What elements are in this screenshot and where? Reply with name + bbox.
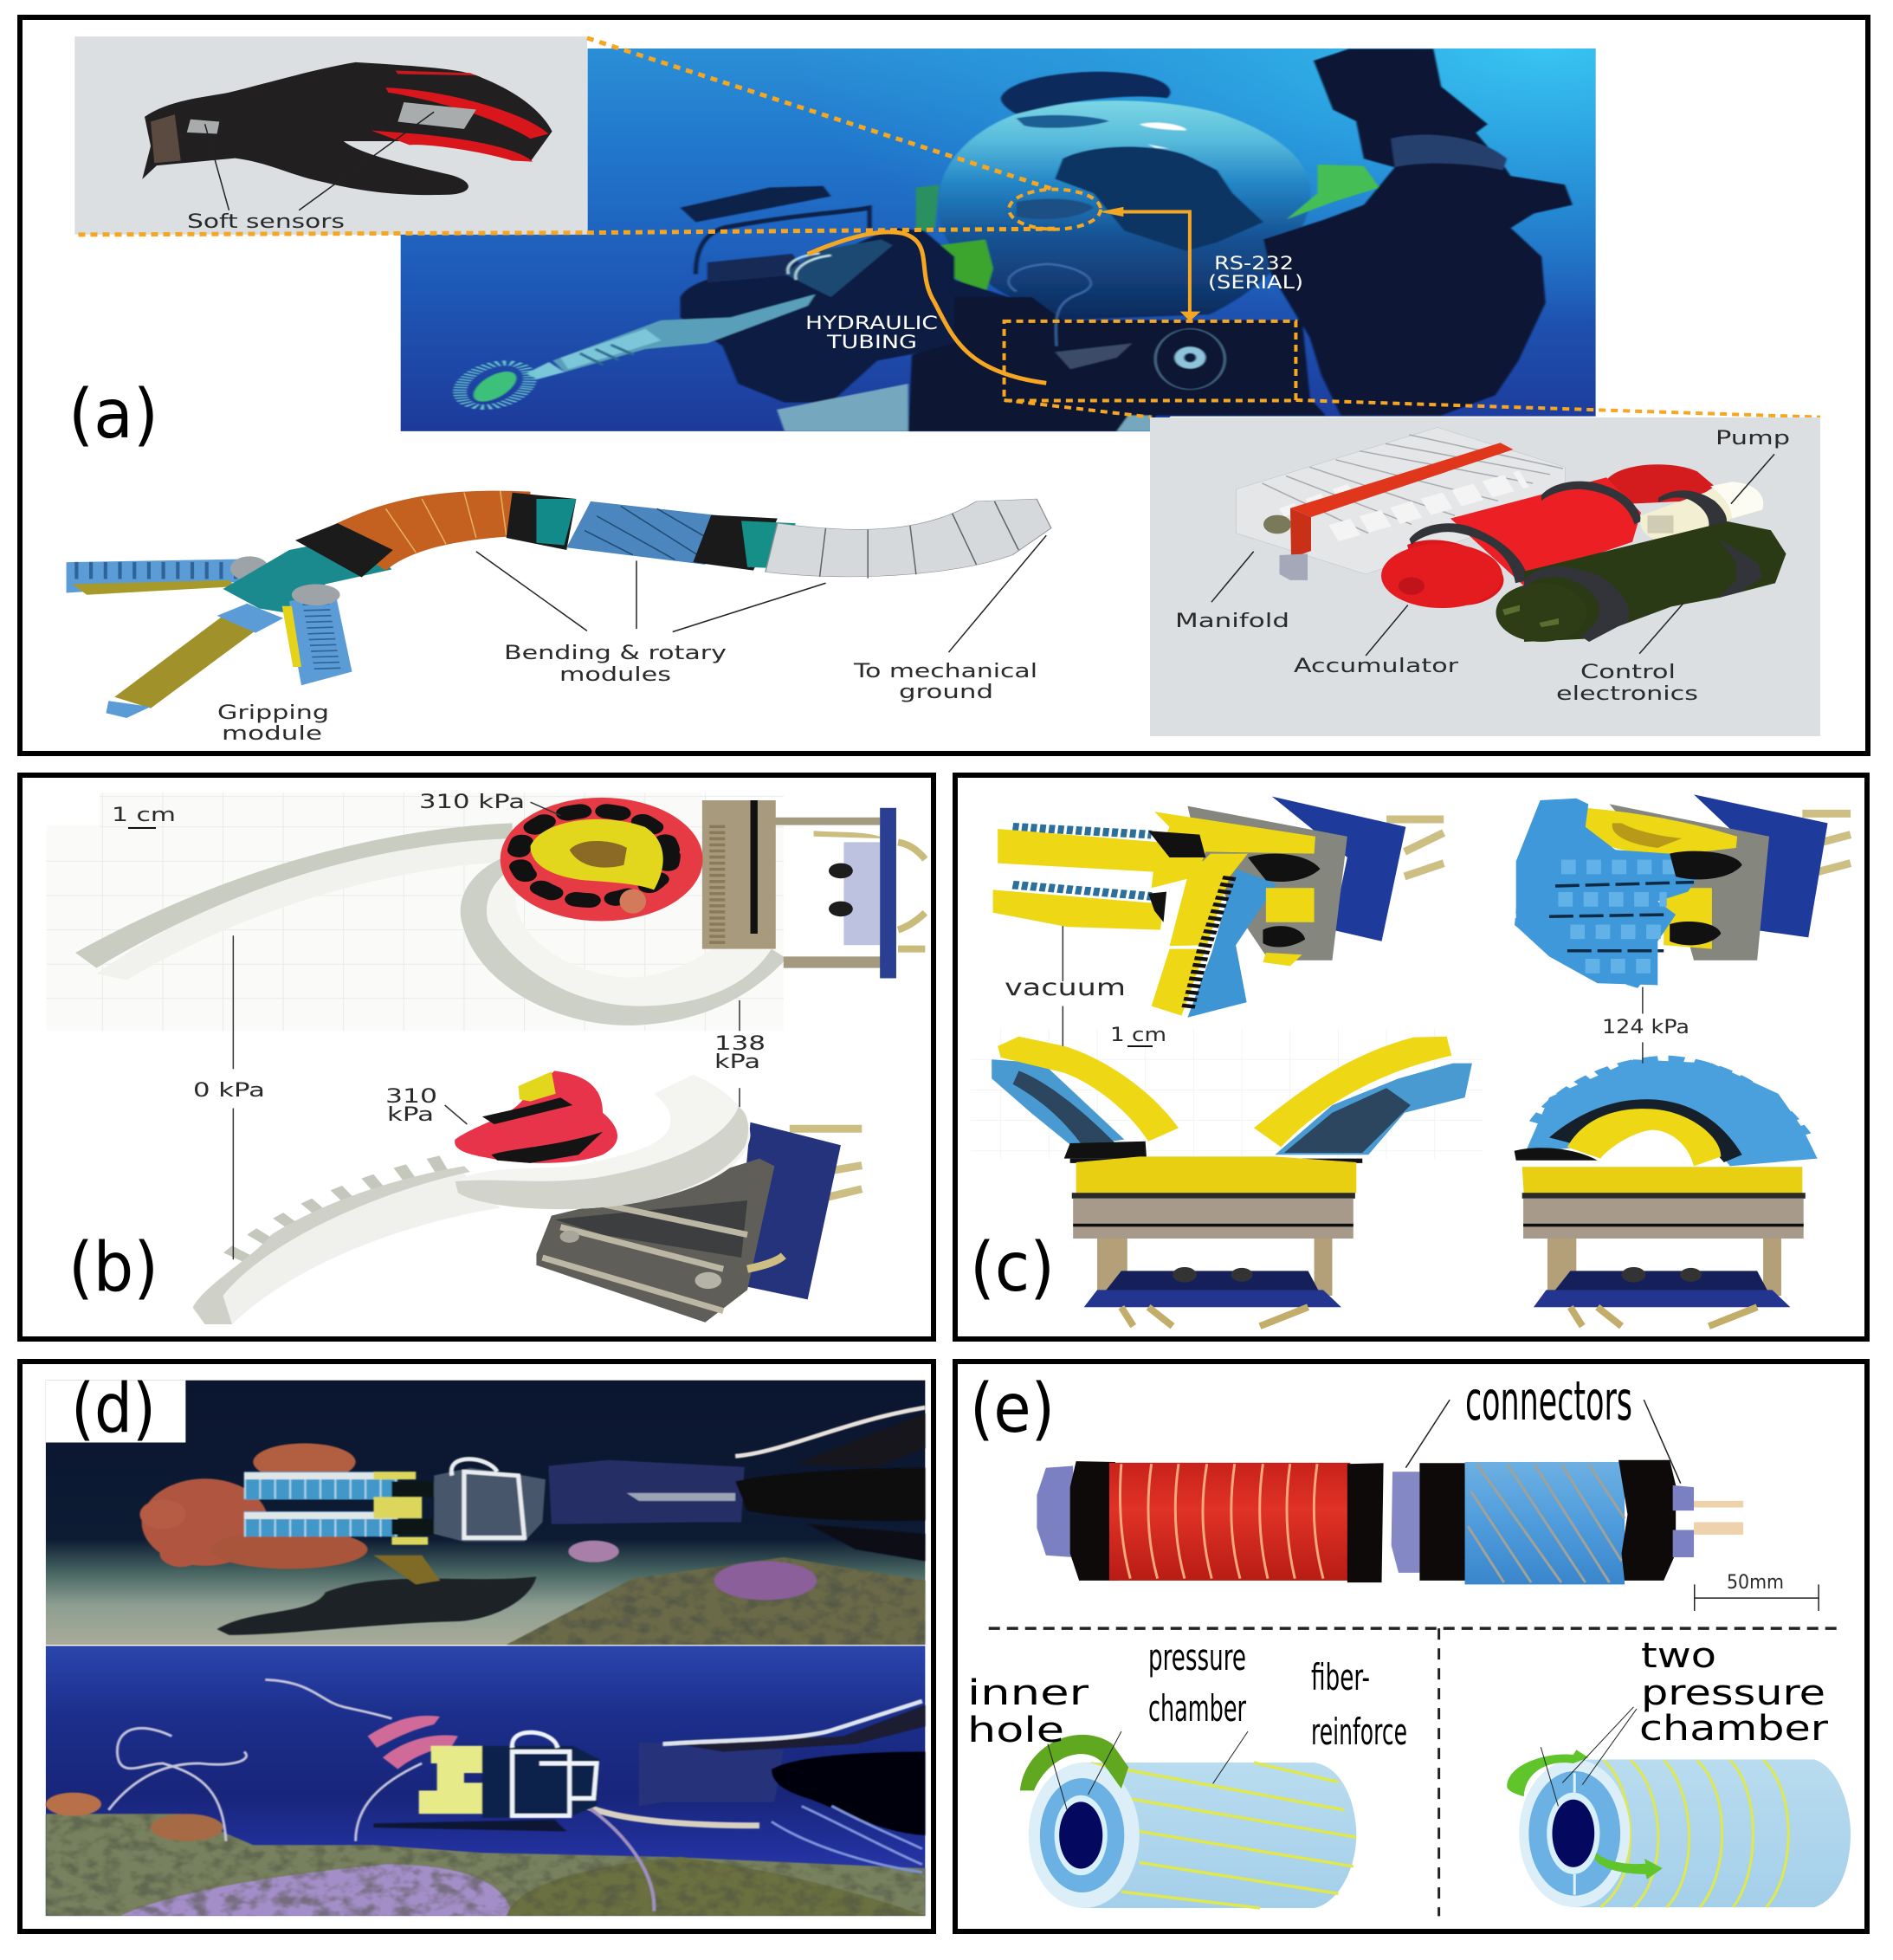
label: inner hole: hole	[967, 1711, 1064, 1750]
label: Bending and rotary modules: Bending & rotary	[504, 643, 727, 664]
panel c: vacuum versus pressure actuation	[955, 775, 1867, 1339]
label: Pump: Pump	[1715, 428, 1790, 450]
panel b border	[20, 775, 934, 1339]
label: RS-232 serial: RS-232	[1214, 253, 1294, 274]
label: Control electronics: electronics	[1556, 683, 1698, 705]
label: hydraulic tubing	[805, 313, 938, 353]
label: connectors: connectors	[1465, 1369, 1632, 1433]
orange callouts: dashed zoom lines, hydraulic tubing and RS-232 arrow	[78, 38, 1820, 417]
electronics housing	[1524, 521, 1786, 642]
white label backing	[46, 1381, 185, 1443]
label: fiber-reinforce	[1311, 1656, 1407, 1753]
closed gripper, top view	[1516, 794, 1851, 985]
label: 138 kPa	[714, 1033, 766, 1073]
dashed dividers	[989, 1628, 1838, 1916]
label: Accumulator: Accumulator	[1294, 656, 1459, 677]
label: Soft sensors: Soft sensors	[187, 211, 345, 233]
label: Bending and rotary modules	[504, 643, 727, 686]
label: 310 kPa top: 310 kPa	[419, 792, 525, 813]
panel d artwork	[46, 1381, 925, 1916]
label: two pressure chamber: chamber	[1639, 1709, 1829, 1749]
label: two pressure chamber: two	[1641, 1636, 1716, 1676]
red twisted actuator at 310 kPa, top view	[501, 798, 703, 921]
open gripper, top view	[993, 797, 1444, 1018]
label: Control electronics: Control	[1580, 662, 1676, 683]
label: pressure chamber	[1148, 1636, 1246, 1730]
label: 310 kPa lower	[385, 1086, 437, 1126]
mounting plate and manifold, top view	[702, 800, 925, 978]
underwater submersible photo	[401, 49, 1596, 431]
panel a border	[20, 17, 1868, 754]
label: To mechanical ground: To mechanical	[853, 661, 1037, 682]
label: Gripping module	[217, 702, 329, 745]
label: pressure chamber: pressure	[1148, 1636, 1246, 1679]
lower photo: gorgonian sampling	[46, 1646, 925, 1916]
scale: 1 cm: 1 cm	[1110, 1025, 1166, 1046]
pump and accumulator bodies	[1606, 464, 1715, 504]
leader lines	[1063, 926, 1643, 1064]
label: fiber-reinforce: reinforce	[1311, 1711, 1407, 1753]
label: Control electronics	[1556, 662, 1698, 705]
grid backdrop	[47, 792, 784, 1031]
label: 0 kPa: 0 kPa	[193, 1080, 265, 1102]
panel d: field deployment photos	[20, 1362, 934, 1931]
closed gripper, front view	[1515, 1059, 1818, 1326]
label: fiber-reinforce: fiber-	[1311, 1656, 1370, 1698]
label: Gripping module: Gripping	[217, 702, 329, 724]
panel c border	[955, 775, 1867, 1339]
connector leaders and scale bar	[1405, 1400, 1819, 1611]
panel a: soft gripper system on submersible	[20, 17, 1868, 754]
label: inner hole	[967, 1673, 1089, 1750]
actuator at 138 kPa and 0 kPa, top view	[75, 823, 786, 1025]
label: Bending and rotary modules: modules	[559, 664, 671, 686]
manipulator arm CAD rendering	[67, 490, 1051, 718]
label: pressure chamber: chamber	[1148, 1687, 1246, 1730]
panel c artwork	[971, 794, 1851, 1326]
lower mechanism and blue mounting plate	[536, 1122, 862, 1323]
label (c): (c)	[970, 1229, 1055, 1307]
label: inner hole: inner	[967, 1673, 1089, 1713]
label: To mechanical ground	[853, 661, 1037, 703]
red twisted actuator, side view	[455, 1071, 617, 1163]
label: two pressure chamber	[1639, 1636, 1829, 1749]
pressure leader lines	[233, 935, 740, 1259]
panel e artwork	[989, 1400, 1851, 1916]
white actuator, side view	[193, 1075, 751, 1324]
panel b artwork	[47, 792, 925, 1324]
panel e: fiber reinforced actuator structure	[955, 1362, 1867, 1931]
upper photo: coral grasp	[46, 1381, 925, 1645]
scale: 1 cm: 1 cm	[112, 805, 176, 826]
label: RS-232 serial: (SERIAL)	[1208, 272, 1303, 293]
label (e): (e)	[970, 1370, 1055, 1448]
label: vacuum: vacuum	[1005, 974, 1126, 1001]
panel a artwork	[67, 36, 1820, 736]
panel d border	[20, 1362, 934, 1931]
label: Manifold: Manifold	[1175, 611, 1289, 632]
label: 310 kPa lower: 310	[385, 1086, 437, 1108]
label: 124 kPa: 124 kPa	[1602, 1017, 1689, 1038]
panel b: bending actuators under pressure	[20, 775, 934, 1339]
label: hydraulic tubing: HYDRAULIC	[805, 313, 938, 333]
schematic: rotary two-chamber cylinder	[1507, 1707, 1851, 1907]
schematic: bending fiber reinforced cylinder	[1020, 1731, 1356, 1908]
label: 138 kPa: 138	[714, 1033, 766, 1055]
label: 138 kPa: kPa	[714, 1051, 760, 1073]
panel e border	[955, 1362, 1867, 1931]
label: 310 kPa lower: kPa	[387, 1104, 434, 1126]
scale: 1 cm	[112, 805, 176, 829]
label: two pressure chamber: pressure	[1641, 1673, 1825, 1713]
label (a): (a)	[68, 376, 158, 454]
inset: sensor glove	[74, 36, 587, 235]
faint measurement grid	[971, 1029, 1483, 1159]
label (d): (d)	[71, 1370, 156, 1448]
transparent manifold box	[1237, 428, 1566, 574]
label: RS-232 serial	[1208, 253, 1303, 293]
label: Gripping module: module	[222, 723, 322, 745]
inset: hydraulic power pack	[1150, 417, 1820, 736]
label: To mechanical ground: ground	[899, 682, 993, 703]
label: 50mm: 50mm	[1727, 1572, 1784, 1594]
label: hydraulic tubing: TUBING	[826, 332, 917, 353]
label (b): (b)	[68, 1229, 158, 1307]
open gripper, front view	[992, 1037, 1472, 1326]
photo of bending and rotary actuators	[1037, 1460, 1743, 1584]
